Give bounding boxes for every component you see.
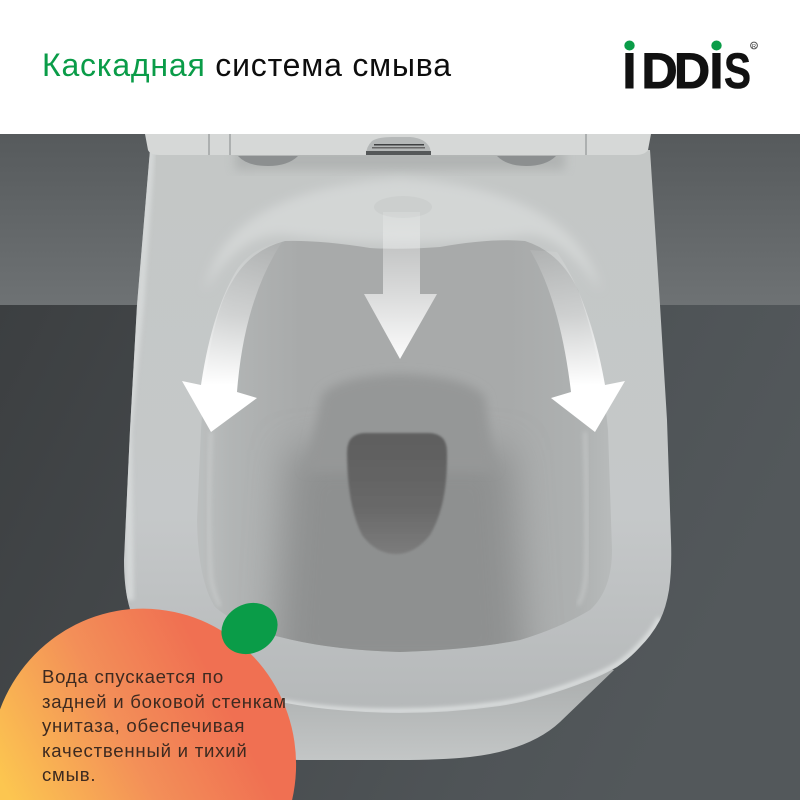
logo: IDDIS: D: [642, 43, 678, 99]
background floor: [0, 305, 800, 800]
logo: IDDIS: [622, 40, 757, 99]
logo: IDDIS: R: [752, 44, 756, 50]
bowl shading: [275, 374, 525, 680]
callout text: унитаза, обеспечивая: [42, 715, 245, 736]
arrow: center: [364, 196, 437, 359]
logo: IDDIS: S: [724, 43, 751, 99]
arrow: right: [530, 250, 625, 432]
callout text: смыв.: [42, 764, 96, 785]
rear ledge: [205, 178, 600, 290]
title: Каскадная система смыва: [42, 47, 452, 83]
background wall: [0, 134, 800, 305]
arrow: left: [182, 242, 282, 432]
logo: IDDIS: D: [674, 43, 710, 99]
right hinge: [497, 156, 556, 166]
callout text: качественный и тихий: [42, 740, 248, 761]
orange callout circle: [0, 609, 296, 800]
drain hole: [347, 433, 447, 554]
callout text: задней и боковой стенкам: [42, 691, 287, 712]
chrome flush button: [366, 137, 431, 155]
side wall crease left: [209, 432, 220, 606]
left hinge: [238, 156, 298, 166]
toilet illustration: [124, 134, 671, 760]
callout text: Вода спускается по: [42, 666, 224, 687]
white header band: [0, 0, 800, 134]
green accent blob: [212, 593, 287, 664]
rim shading and highlights: [128, 150, 660, 711]
side wall crease right: [578, 432, 587, 605]
seat seams: [209, 134, 586, 155]
toilet base below rim: [200, 650, 614, 760]
logo: IDDIS: I: [622, 43, 636, 99]
logo: IDDIS: I: [710, 43, 723, 99]
inner bowl: [197, 240, 612, 652]
toilet rim: [124, 150, 671, 713]
seat hinge bar: [145, 134, 651, 155]
